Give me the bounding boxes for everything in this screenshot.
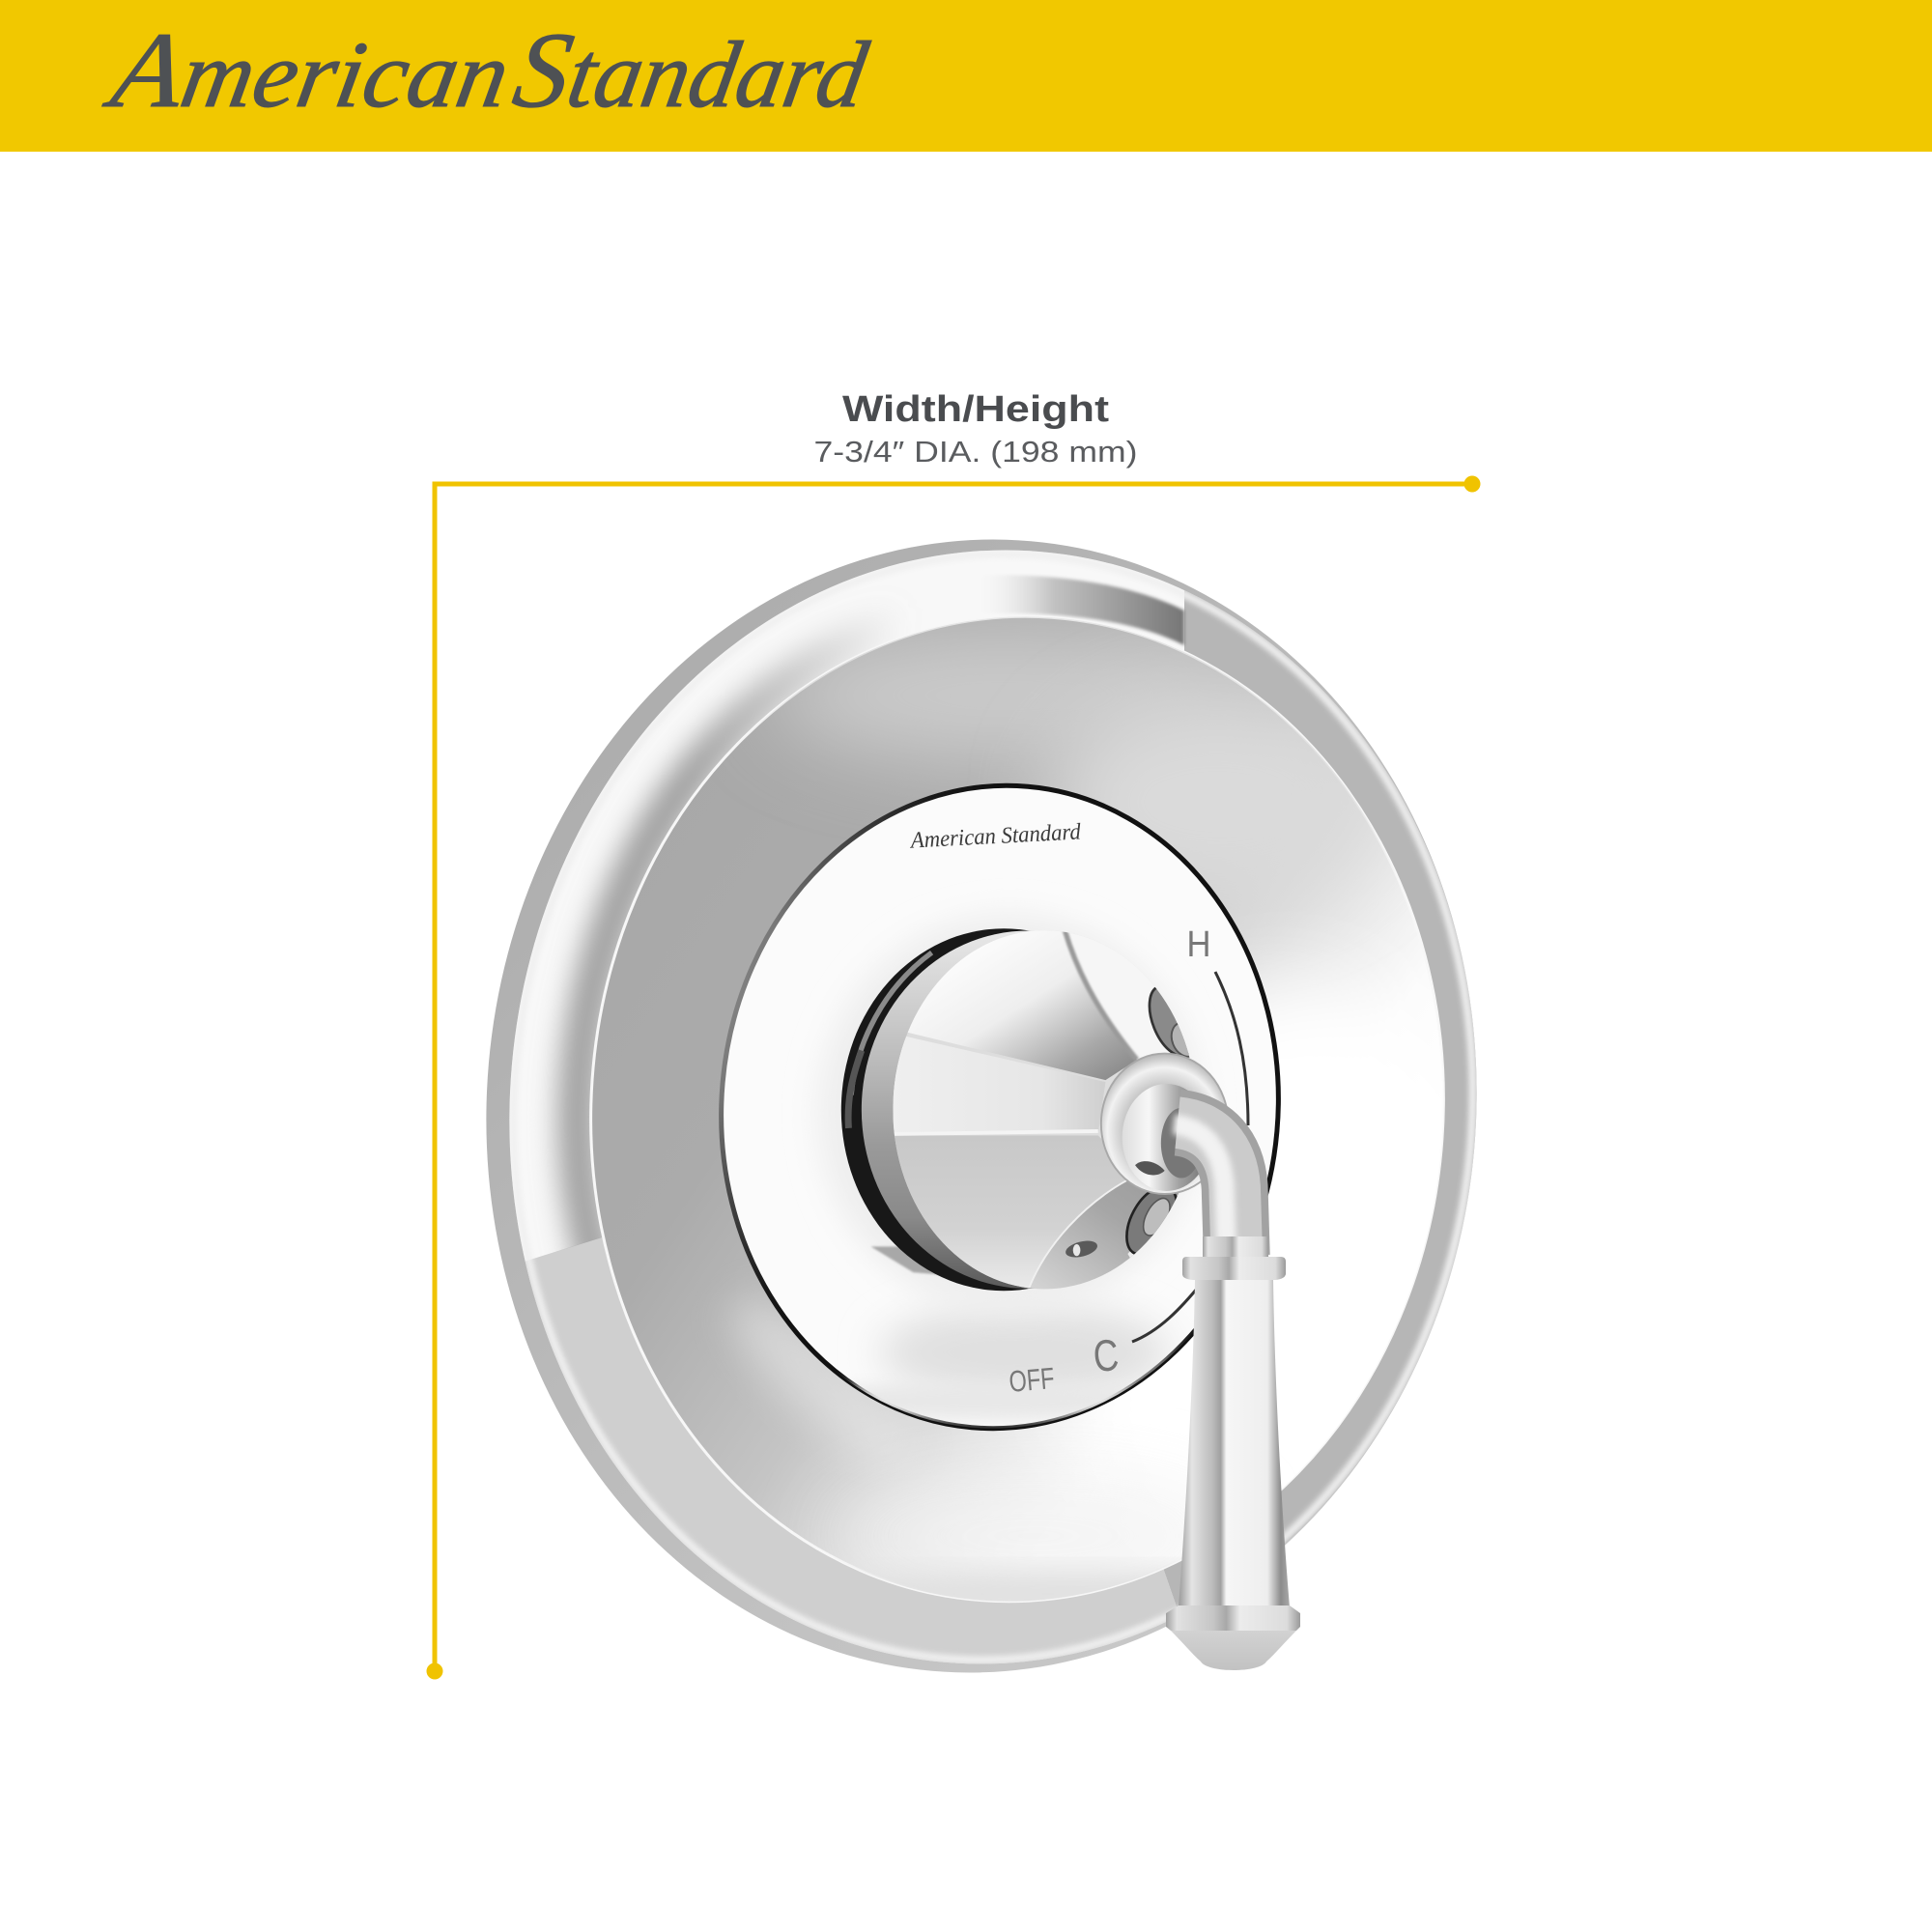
logo: American Standard xyxy=(97,11,877,130)
logo: American Standard: Standard xyxy=(506,11,877,130)
lower band xyxy=(1166,1605,1300,1631)
central dial plate xyxy=(719,782,1281,1432)
handle elbow tube xyxy=(1174,1122,1236,1256)
lever handle xyxy=(1101,1054,1300,1670)
dimension bracket xyxy=(427,475,1480,1679)
plate logo: American Standard xyxy=(908,819,1082,854)
upper band xyxy=(1182,1257,1286,1280)
handle ball joint xyxy=(1122,1084,1210,1191)
label H: H xyxy=(1186,924,1211,965)
heading: Width/Height: Width/Height xyxy=(842,389,1109,430)
escutcheon outer rim xyxy=(486,539,1477,1673)
dimension text: 7-3/4″ DIA. (198 mm) xyxy=(813,435,1138,469)
handle tip xyxy=(1171,1631,1296,1670)
handle stem xyxy=(1179,1278,1290,1607)
neck xyxy=(1203,1236,1268,1258)
handle collar xyxy=(1101,1054,1228,1194)
label C: C xyxy=(1092,1329,1121,1381)
product: shower valve trim xyxy=(486,539,1477,1673)
temperature arc cold xyxy=(1132,1283,1202,1342)
logo: American Standard: American xyxy=(97,11,519,130)
temperature arc hot xyxy=(1215,972,1248,1125)
temperature knob xyxy=(822,920,1190,1291)
escutcheon face xyxy=(589,616,1445,1604)
label OFF: OFF xyxy=(1008,1361,1056,1399)
header banner xyxy=(0,0,1932,152)
